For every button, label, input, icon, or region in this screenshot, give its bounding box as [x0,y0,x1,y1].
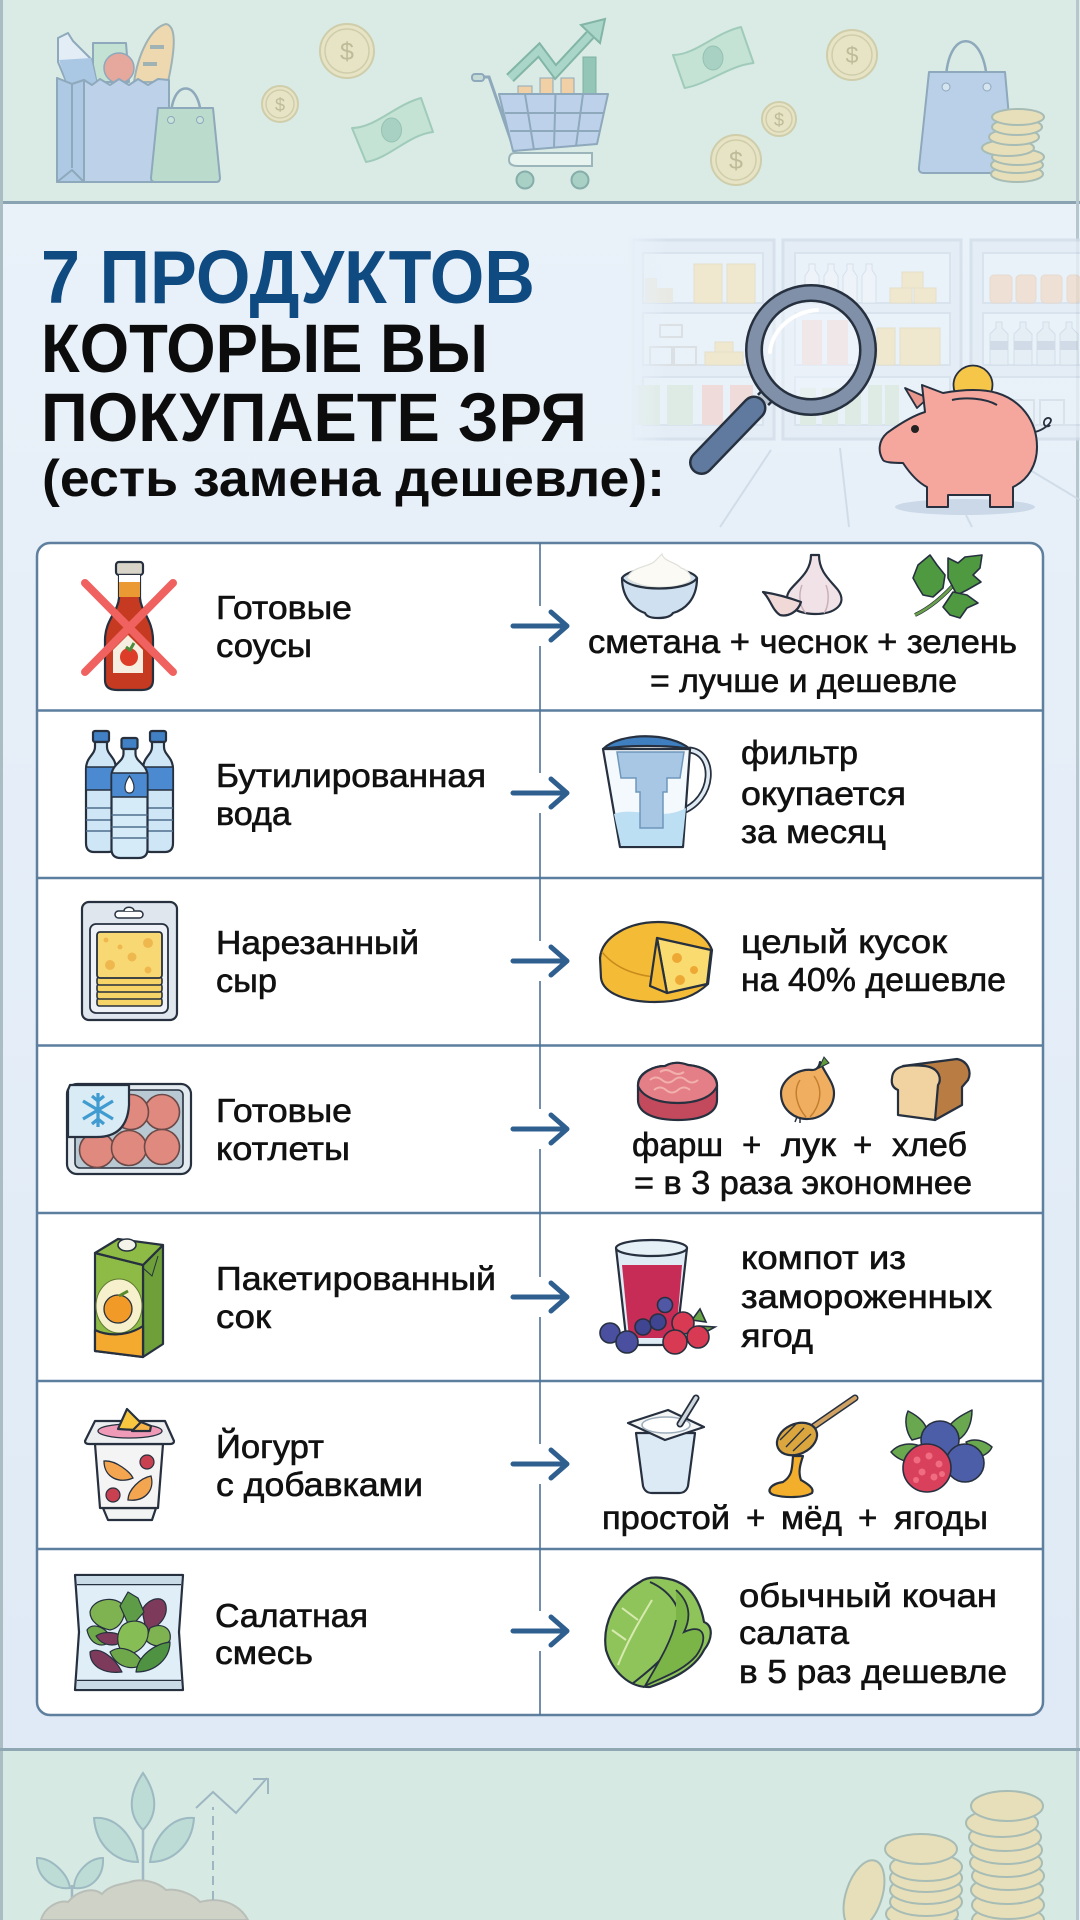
label: salad mix: Салатная [215,1597,368,1634]
store shelves background [628,235,1080,527]
text: mince + onion + bread: лук [781,1126,837,1163]
icon: lettuce head [605,1578,711,1687]
icon: magnifying glass [702,293,868,462]
text: plain + honey + berries: + [858,1499,877,1536]
text: filter pays off: фильтр [741,734,858,771]
icon: frozen cutlets tray [67,1084,191,1174]
icon: plain yogurt with spoon [628,1398,704,1493]
arrow [513,606,567,646]
icon: coins: $ [729,147,743,175]
icon: cart with rising chart [472,19,608,188]
icon: sliced cheese package [82,902,177,1020]
icon: parsley [913,555,982,618]
text: mince + onion + bread: = в 3 раза экономнее [634,1164,972,1201]
label: ready sauces [216,589,352,664]
row 6: yogurt with additives [85,1398,992,1536]
icon: grocery paper bag [57,24,174,182]
icon: green shopping bag [151,88,220,182]
label: ready cutlets: Готовые [216,1092,352,1129]
label: yogurt with additives: с добавками [216,1466,423,1503]
text: sour cream + garlic + herbs: сметана + чеснок + зелень [588,623,1017,660]
icon: coins: $ [275,95,285,115]
label: packaged juice: сок [216,1298,272,1335]
icon: fruit yogurt cup [85,1409,174,1520]
icon: onion [781,1057,834,1123]
label: bottled water [216,757,486,832]
text: sour cream + garlic + herbs [588,623,1017,699]
text: mince + onion + bread: + [742,1126,761,1163]
text: frozen berry compote [741,1239,993,1354]
icon: garlic [763,555,841,615]
icon: sprouts growing from soil [37,1773,248,1920]
icon: coins: $ [774,110,784,130]
arrow [513,1611,567,1651]
text: whole piece [741,923,1006,998]
label: yogurt with additives [216,1428,423,1503]
title: (есть замена дешевле): [42,450,665,508]
title [41,235,665,508]
text: filter pays off [741,734,906,850]
text: ordinary lettuce head: обычный кочан [739,1577,997,1614]
text: frozen berry compote: замороженных [741,1278,993,1315]
arrow [513,1444,567,1484]
icon: minced meat [638,1063,717,1120]
label: yogurt with additives: Йогурт [216,1428,324,1465]
text: whole piece: на 40% дешевле [741,961,1006,998]
label: salad mix: смесь [215,1634,313,1671]
icon: water filter pitcher [603,736,708,847]
icon: coin stacks [836,1791,1044,1920]
text: ordinary lettuce head [739,1577,1007,1690]
label: packaged juice: Пакетированный [216,1260,496,1297]
text: mince + onion + bread: фарш [632,1126,723,1163]
label: ready sauces: соусы [216,627,312,664]
title: КОТОРЫЕ ВЫ [41,310,488,387]
text: whole piece: целый кусок [741,923,948,960]
text: plain + honey + berries: ягоды [894,1499,988,1536]
icon: coins [262,24,877,185]
icon: salad bag [75,1575,183,1690]
icon: honey dipper [769,1398,855,1497]
text: mince + onion + bread: + [853,1126,872,1163]
label: sliced cheese: Нарезанный [216,924,419,961]
title: ПОКУПАЕТЕ ЗРЯ [41,379,587,456]
label: salad mix [215,1597,368,1671]
icon: cheese wheel [600,922,712,1002]
text: mince + onion + bread [632,1126,972,1201]
row 3: sliced cheese [82,902,1006,1020]
label: packaged juice [216,1260,496,1335]
text: frozen berry compote: ягод [741,1317,813,1354]
icon: sour cream bowl [622,554,697,618]
row 2: bottled water [86,731,906,858]
label: ready cutlets [216,1092,352,1167]
icon: glass of compote with berries [600,1240,715,1354]
label: bottled water: Бутилированная [216,757,486,794]
label: ready sauces: Готовые [216,589,352,626]
icon: mixed berries [891,1410,992,1492]
icon: crossed-out ketchup [85,562,173,690]
text: plain + honey + berries: мёд [781,1499,842,1536]
bottom decorative band [0,1748,1080,1920]
text: frozen berry compote: компот из [741,1239,906,1276]
icon: growth arrow [196,1778,268,1900]
row 4: ready cutlets [67,1057,972,1201]
text: plain + honey + berries: простой [602,1499,730,1536]
icon: bread loaf [892,1059,970,1120]
row 1: ready-made sauces [85,554,1017,699]
label: sliced cheese: сыр [216,962,277,999]
text: plain + honey + berries: + [746,1499,765,1536]
text: filter pays off: окупается [741,775,906,812]
icon: juice carton [95,1239,163,1357]
title: 7 ПРОДУКТОВ [41,235,535,319]
row 5: packaged juice [95,1239,993,1357]
icon: banknotes [352,27,754,162]
text: ordinary lettuce head: салата [739,1614,850,1651]
top decorative band [0,0,1080,204]
table panel [37,543,1043,1715]
label: sliced cheese [216,924,419,999]
icon: water bottles [86,731,173,858]
icon: coins: $ [846,42,859,68]
icon: piggy bank with coin [880,366,1051,515]
arrow [513,1277,567,1317]
text: sour cream + garlic + herbs: = лучше и дешевле [650,662,957,699]
arrow [513,941,567,981]
icon: blue shopping bag with coin stack [919,41,1044,182]
label: bottled water: вода [216,795,292,832]
icon: coins: $ [340,38,354,66]
text: filter pays off: за месяц [741,813,886,850]
arrow [513,773,567,813]
text: ordinary lettuce head: в 5 раз дешевле [739,1653,1007,1690]
label: ready cutlets: котлеты [216,1130,350,1167]
text: mince + onion + bread: хлеб [892,1126,967,1163]
arrow [513,1109,567,1149]
text: plain + honey + berries [602,1499,988,1536]
row 7: salad mix [75,1575,1007,1690]
